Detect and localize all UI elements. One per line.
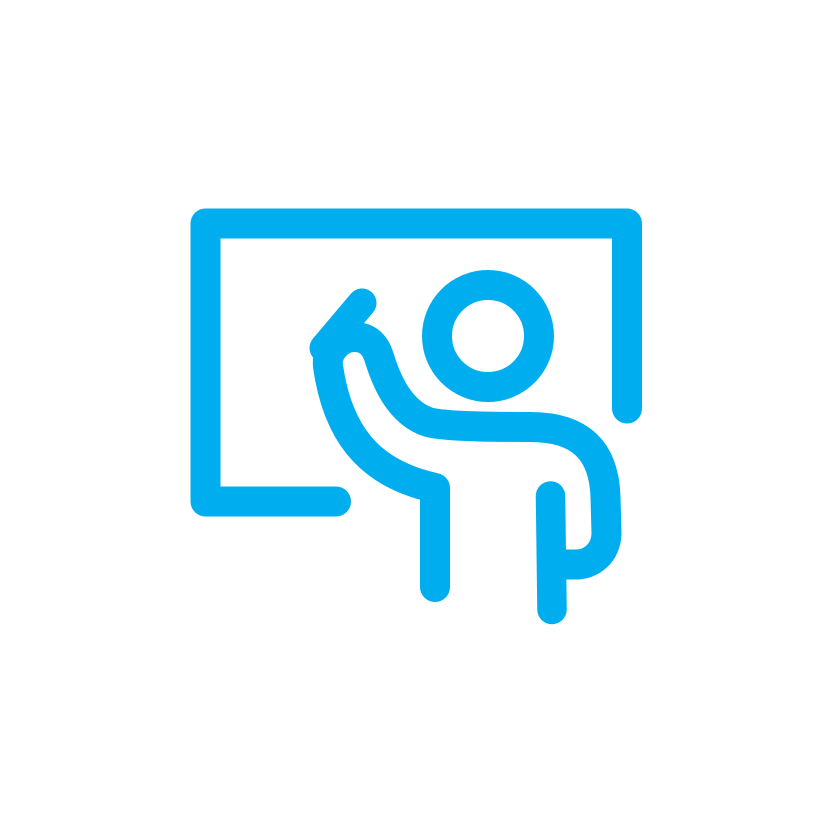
icon: body and raised arm xyxy=(328,337,606,587)
icon: pointer in raised hand xyxy=(324,303,362,348)
icon: stem join between hand and leg xyxy=(540,510,566,548)
icon: lower arm and leg xyxy=(550,496,552,610)
icon: whiteboard outline xyxy=(206,224,627,502)
icon: head xyxy=(437,285,539,387)
